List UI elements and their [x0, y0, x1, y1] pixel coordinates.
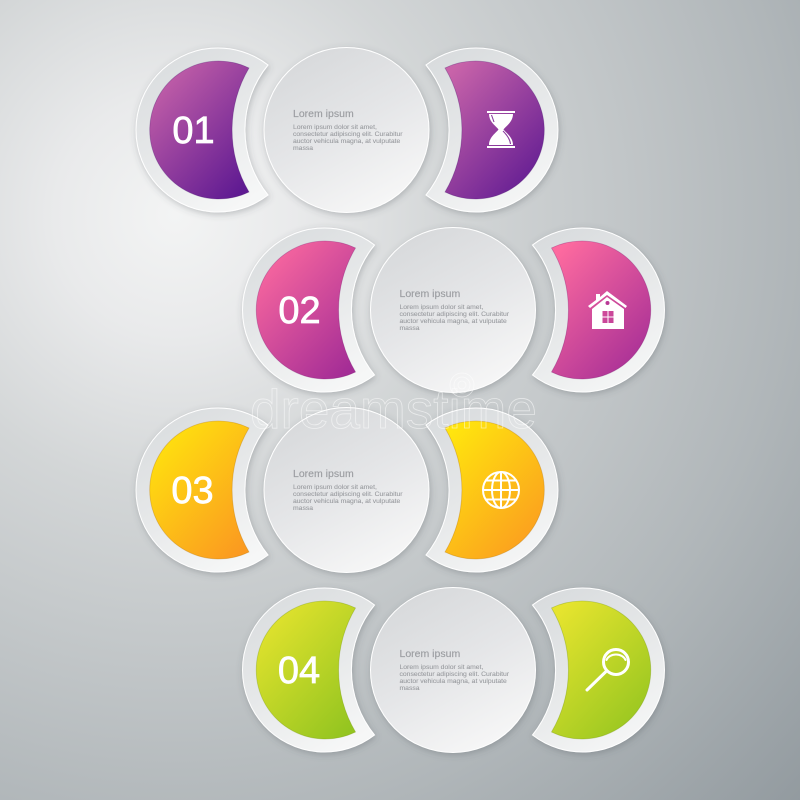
text block: Lorem ipsum — [400, 648, 460, 660]
centre disc — [370, 228, 536, 392]
right colour crescent — [552, 601, 651, 739]
number 03: 03 — [171, 470, 214, 512]
text block — [293, 468, 403, 512]
text block: consectetur adipiscing elit. Curabitur — [293, 131, 403, 138]
right colour crescent — [552, 241, 651, 379]
text block: consectetur adipiscing elit. Curabitur — [400, 311, 510, 318]
icon: magnifier — [587, 650, 628, 690]
right crescent plate — [532, 228, 664, 392]
text block: Lorem ipsum dolor sit amet, — [293, 484, 377, 491]
number 01: 01 — [172, 110, 215, 152]
text block: auctor vehicula magna, at vulputate — [293, 498, 401, 505]
text block: massa — [400, 685, 420, 692]
row 04: green — [243, 588, 664, 752]
text block: Lorem ipsum dolor sit amet, — [400, 304, 483, 311]
text block: auctor vehicula magna, at vulputate — [400, 318, 507, 325]
number 04: 04 — [278, 650, 320, 692]
text block: Lorem ipsum — [293, 108, 354, 120]
text block: consectetur adipiscing elit. Curabitur — [400, 671, 510, 678]
row 02: pink — [243, 228, 664, 392]
watermark: dreamstime — [250, 378, 537, 440]
centre disc — [264, 48, 429, 212]
text block: auctor vehicula magna, at vulputate — [293, 138, 401, 145]
left crescent plate — [136, 48, 268, 212]
text block: massa — [293, 145, 313, 152]
text block: Lorem ipsum — [400, 288, 460, 300]
row 03: yellow — [136, 408, 558, 572]
text block — [293, 108, 403, 152]
text block — [400, 648, 510, 692]
left crescent plate — [136, 408, 268, 572]
centre disc — [370, 588, 536, 752]
left colour crescent — [256, 601, 356, 739]
row 01: purple — [136, 48, 558, 212]
right crescent plate — [426, 48, 558, 212]
text block: Lorem ipsum dolor sit amet, — [400, 664, 483, 671]
left crescent plate — [243, 228, 374, 392]
right crescent plate — [532, 588, 664, 752]
right crescent plate — [426, 408, 558, 572]
left colour crescent — [150, 61, 249, 199]
text block — [400, 288, 510, 332]
centre disc — [264, 408, 429, 572]
text block: massa — [400, 325, 420, 332]
icon: globe — [483, 472, 519, 508]
right colour crescent — [445, 421, 544, 559]
text block: Lorem ipsum — [293, 468, 354, 480]
left colour crescent — [256, 241, 356, 379]
icon: house — [588, 291, 627, 329]
text block: massa — [293, 505, 313, 512]
right colour crescent — [445, 61, 544, 199]
icon: hourglass — [487, 111, 515, 148]
text block: consectetur adipiscing elit. Curabitur — [293, 491, 403, 498]
text block: Lorem ipsum dolor sit amet, — [293, 124, 377, 131]
left crescent plate — [243, 588, 374, 752]
number 02: 02 — [278, 290, 321, 332]
left colour crescent — [150, 421, 249, 559]
text block: auctor vehicula magna, at vulputate — [400, 678, 507, 685]
